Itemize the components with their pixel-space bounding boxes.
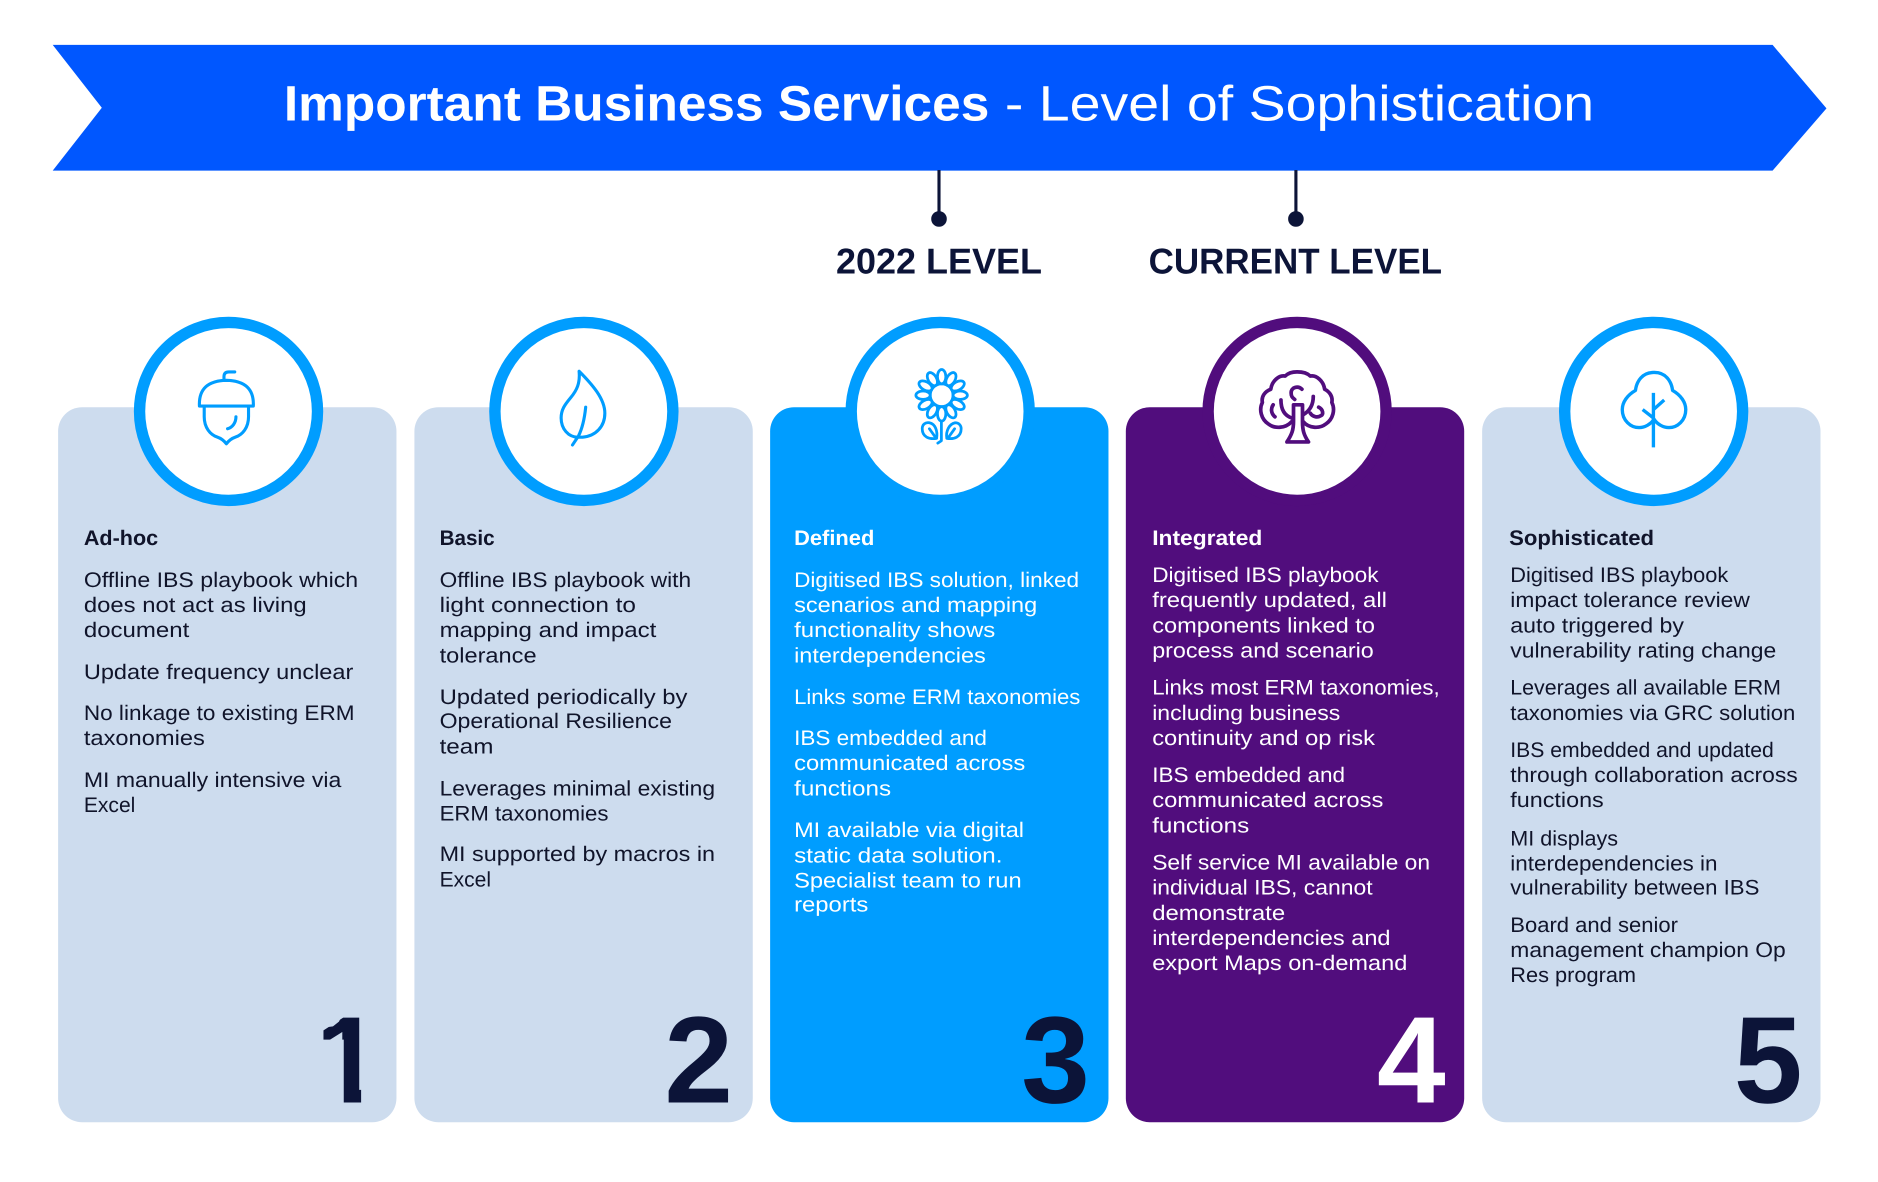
text block: sophisticated criteria: auto triggered by [1510, 613, 1684, 637]
text block: integrated criteria: Self service MI available on [1152, 850, 1430, 874]
number 2: 2 [664, 991, 733, 1129]
text block: ad-hoc criteria: Excel [84, 793, 135, 817]
text block: defined criteria: MI available via digital [794, 818, 1024, 842]
text block: sophisticated criteria: Res program [1510, 963, 1636, 987]
heading: ad-hoc: Ad-hoc [84, 526, 158, 550]
text block: sophisticated criteria: Leverages all available ERM [1510, 675, 1781, 699]
icon: flower [916, 369, 967, 443]
text block: basic criteria: tolerance [440, 643, 537, 667]
text block: ad-hoc criteria: document [84, 618, 189, 642]
text block: sophisticated criteria: taxonomies via GRC solution [1510, 701, 1795, 725]
number 3: 3 [1021, 991, 1090, 1129]
panel: level 2 basic [414, 322, 753, 1129]
text block: integrated criteria: Digitised IBS playbook [1152, 563, 1379, 587]
text block: ad-hoc criteria: No linkage to existing ERM [84, 701, 355, 725]
icon: tree [1622, 372, 1686, 447]
text block: integrated criteria: frequently updated, all [1152, 588, 1387, 612]
text block: defined criteria: IBS embedded and [794, 726, 987, 750]
panel: level 1 ad-hoc [58, 322, 396, 1129]
text block: sophisticated criteria: vulnerability rating change [1510, 638, 1776, 662]
marker: current level [1149, 170, 1442, 282]
text block: sophisticated criteria: impact tolerance review [1510, 588, 1750, 612]
text block: integrated criteria: components linked to [1152, 613, 1375, 637]
text block: sophisticated criteria: vulnerability between IBS [1510, 876, 1759, 899]
text block: sophisticated criteria: functions [1510, 788, 1604, 812]
text block: sophisticated criteria: Board and senior [1510, 913, 1678, 937]
heading: integrated: Integrated [1152, 526, 1262, 550]
text block: defined criteria [794, 568, 1081, 916]
text block: basic criteria: Offline IBS playbook with [440, 568, 691, 592]
text block: defined criteria: interdependencies [794, 643, 986, 667]
text block: defined criteria: functionality shows [794, 618, 996, 642]
number 5: 5 [1734, 991, 1803, 1129]
text block: sophisticated criteria: Digitised IBS playbook [1510, 563, 1729, 587]
icon: acorn [199, 372, 253, 444]
text block: basic criteria [440, 568, 715, 891]
panel: level 5 sophisticated [1482, 322, 1820, 1129]
text block: integrated criteria: communicated across [1152, 788, 1384, 812]
title banner [53, 45, 1826, 171]
text block: basic criteria: Operational Resilience [440, 709, 672, 733]
text block: integrated criteria: interdependencies and [1152, 926, 1391, 950]
text block: integrated criteria [1152, 563, 1440, 975]
text block: basic criteria: mapping and impact [440, 618, 656, 642]
text block: defined criteria: communicated across [794, 751, 1025, 775]
text block: defined criteria: reports [794, 892, 869, 916]
text block: ad-hoc criteria: Offline IBS playbook which [84, 568, 358, 592]
subtitle: - Level of Sophistication [1005, 75, 1594, 131]
text block: integrated criteria: process and scenario [1152, 638, 1374, 662]
text block: defined criteria: functions [794, 776, 891, 800]
text block: defined criteria: scenarios and mapping [794, 593, 1037, 617]
text block: integrated criteria: including business [1152, 701, 1340, 725]
text block: sophisticated criteria [1510, 563, 1798, 987]
icon: leaf [561, 371, 605, 445]
text block: integrated criteria: functions [1152, 813, 1249, 837]
text block: ad-hoc criteria: does not act as living [84, 593, 307, 617]
text block: integrated criteria: continuity and op risk [1152, 726, 1375, 750]
text block: ad-hoc criteria: MI manually intensive via [84, 768, 342, 792]
text block: integrated criteria: Links most ERM taxonomies, [1152, 675, 1440, 699]
text block: sophisticated criteria: management champion Op [1510, 938, 1786, 962]
heading: defined: Defined [794, 526, 874, 550]
text block: defined criteria: static data solution. [794, 843, 1002, 867]
text block: defined criteria: Links some ERM taxonomies [794, 685, 1081, 709]
text block: sophisticated criteria: IBS embedded and updated [1510, 738, 1774, 762]
text block: basic criteria: MI supported by macros in [440, 842, 715, 866]
text block: basic criteria: team [440, 734, 493, 758]
marker: 2022 level [836, 170, 1042, 282]
panel: level 4 integrated [1126, 322, 1464, 1129]
text block: sophisticated criteria: interdependencies in [1510, 852, 1717, 876]
icon: oak tree [1261, 372, 1333, 442]
text block: basic criteria: light connection to [440, 593, 636, 617]
text block: ad-hoc criteria: Update frequency unclear [84, 660, 354, 684]
text block: sophisticated criteria: MI displays [1510, 826, 1618, 850]
text block: ad-hoc criteria [84, 568, 358, 817]
heading: sophisticated: Sophisticated [1509, 526, 1654, 550]
text block: integrated criteria: export Maps on-demand [1152, 951, 1407, 975]
text block: defined criteria: Specialist team to run [794, 868, 1022, 892]
number 1: 1 [313, 991, 382, 1129]
panel: level 3 defined [770, 322, 1108, 1129]
text block: integrated criteria: individual IBS, cannot [1152, 876, 1373, 899]
text block: basic criteria: ERM taxonomies [440, 801, 609, 825]
text block: integrated criteria: IBS embedded and [1152, 763, 1345, 787]
text block: basic criteria: Updated periodically by [440, 685, 688, 709]
marker: current level: CURRENT LEVEL [1149, 242, 1442, 282]
marker: 2022 level: 2022 LEVEL [836, 242, 1042, 282]
text block: sophisticated criteria: through collaboration across [1510, 763, 1798, 787]
text block: basic criteria: Excel [440, 867, 491, 891]
text block: basic criteria: Leverages minimal existing [440, 776, 715, 800]
number 4: 4 [1377, 991, 1446, 1129]
text block: ad-hoc criteria: taxonomies [84, 726, 205, 750]
text block: integrated criteria: demonstrate [1152, 901, 1285, 925]
title: Important Business Services [284, 75, 989, 131]
text block: defined criteria: Digitised IBS solution, linked [794, 568, 1079, 592]
heading: basic: Basic [440, 526, 495, 550]
